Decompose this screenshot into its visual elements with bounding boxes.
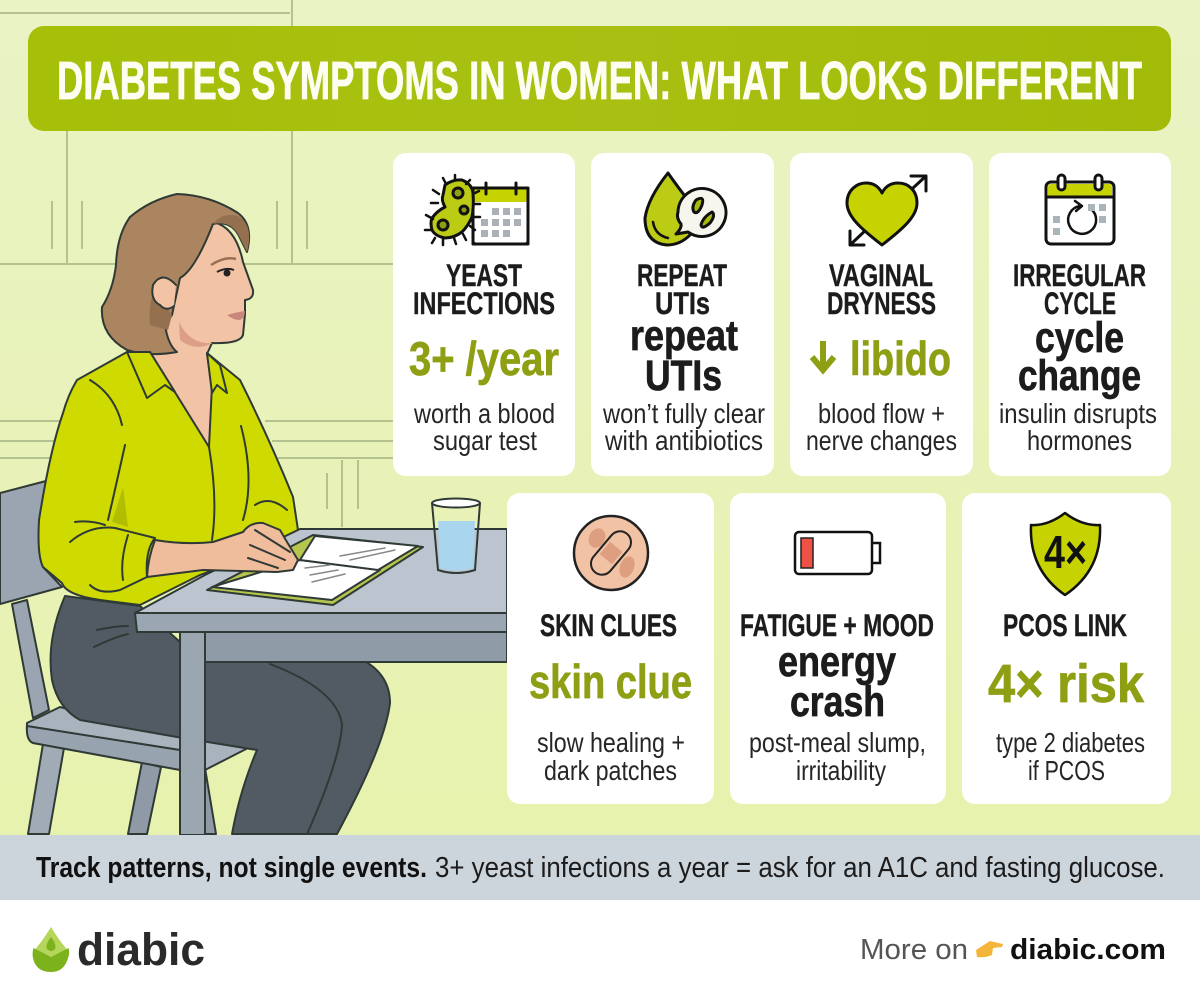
face and neck	[150, 220, 253, 448]
card: repeat UTIs: UTIs	[655, 285, 710, 321]
note: dark patches	[544, 755, 677, 786]
title banner	[28, 26, 1171, 131]
icon: skin patch with bandage	[574, 516, 648, 590]
card: vaginal dryness	[790, 153, 973, 476]
link	[860, 934, 1166, 966]
note	[749, 727, 926, 786]
forearm and hand	[147, 523, 298, 577]
note	[413, 398, 555, 456]
note	[537, 727, 685, 786]
heading: VAGINAL	[829, 257, 933, 293]
note	[806, 398, 957, 456]
chair	[0, 481, 250, 834]
facial features	[211, 258, 245, 320]
heading: YEAST	[446, 257, 522, 293]
heading: PCOS LINK	[1003, 607, 1127, 643]
logo: diabic	[77, 924, 205, 975]
table	[135, 529, 507, 835]
key figure	[812, 332, 951, 385]
icon: shield with 4x: 4×	[1044, 526, 1087, 578]
icon: calendar with cycle arrow	[1046, 175, 1114, 244]
note: sugar test	[433, 425, 537, 456]
note	[602, 398, 765, 456]
icon: heart with arrow	[847, 176, 926, 245]
illustration: woman at table	[0, 194, 507, 835]
key figure: 4× risk	[988, 654, 1145, 714]
heading: SKIN CLUES	[540, 607, 677, 643]
link: diabic.com	[1010, 934, 1166, 966]
note: hormones	[1027, 425, 1132, 456]
key phrase: repeat	[630, 312, 738, 360]
takeaway bar	[0, 835, 1200, 900]
card: irregular cycle: CYCLE	[1044, 285, 1116, 321]
note: irritability	[796, 755, 886, 786]
key figure: 3+ /year	[409, 332, 559, 385]
book	[207, 535, 423, 605]
blouse	[38, 352, 298, 605]
icon: low battery	[795, 532, 880, 574]
card: repeat UTIs	[591, 153, 774, 476]
icon: bacterium and calendar	[425, 175, 528, 245]
heading: IRREGULAR	[1013, 257, 1146, 293]
footer	[0, 900, 1200, 1000]
link: More on	[860, 934, 968, 966]
note: post-meal slump,	[749, 727, 926, 758]
note	[996, 727, 1145, 786]
card: skin clues	[507, 493, 714, 804]
note: nerve changes	[806, 425, 957, 456]
trousers	[51, 596, 390, 834]
key phrase: cycle	[1035, 314, 1124, 362]
note: if PCOS	[1028, 755, 1105, 786]
note: won’t fully clear	[602, 398, 765, 429]
hair	[102, 194, 249, 354]
icon: drop with bacteria bubble	[645, 173, 726, 245]
key phrase: skin clue	[529, 655, 692, 708]
icon: shield with 4x	[1031, 513, 1100, 595]
heading: REPEAT	[637, 257, 727, 293]
card: fatigue and mood: crash	[790, 678, 885, 726]
card: yeast infections: INFECTIONS	[413, 285, 555, 321]
note: insulin disrupts	[999, 398, 1157, 429]
heading: FATIGUE + MOOD	[740, 607, 934, 643]
takeaway bar: Track patterns, not single events.	[36, 852, 427, 884]
card: vaginal dryness: DRYNESS	[827, 285, 936, 321]
note: with antibiotics	[604, 425, 763, 456]
key phrase: energy	[778, 638, 896, 686]
card: PCOS link	[962, 493, 1171, 804]
card: repeat UTIs: UTIs	[645, 352, 722, 400]
water glass	[432, 498, 480, 573]
note	[999, 398, 1157, 456]
note: slow healing +	[537, 727, 685, 758]
card: irregular cycle: change	[1018, 352, 1141, 400]
note: blood flow +	[818, 398, 945, 429]
ear	[152, 278, 176, 309]
key figure: libido	[850, 332, 951, 385]
card: yeast infections	[393, 153, 575, 476]
note: type 2 diabetes	[996, 727, 1145, 758]
note: worth a blood	[413, 398, 555, 429]
card: fatigue and mood	[730, 493, 946, 804]
card: irregular cycle	[989, 153, 1171, 476]
